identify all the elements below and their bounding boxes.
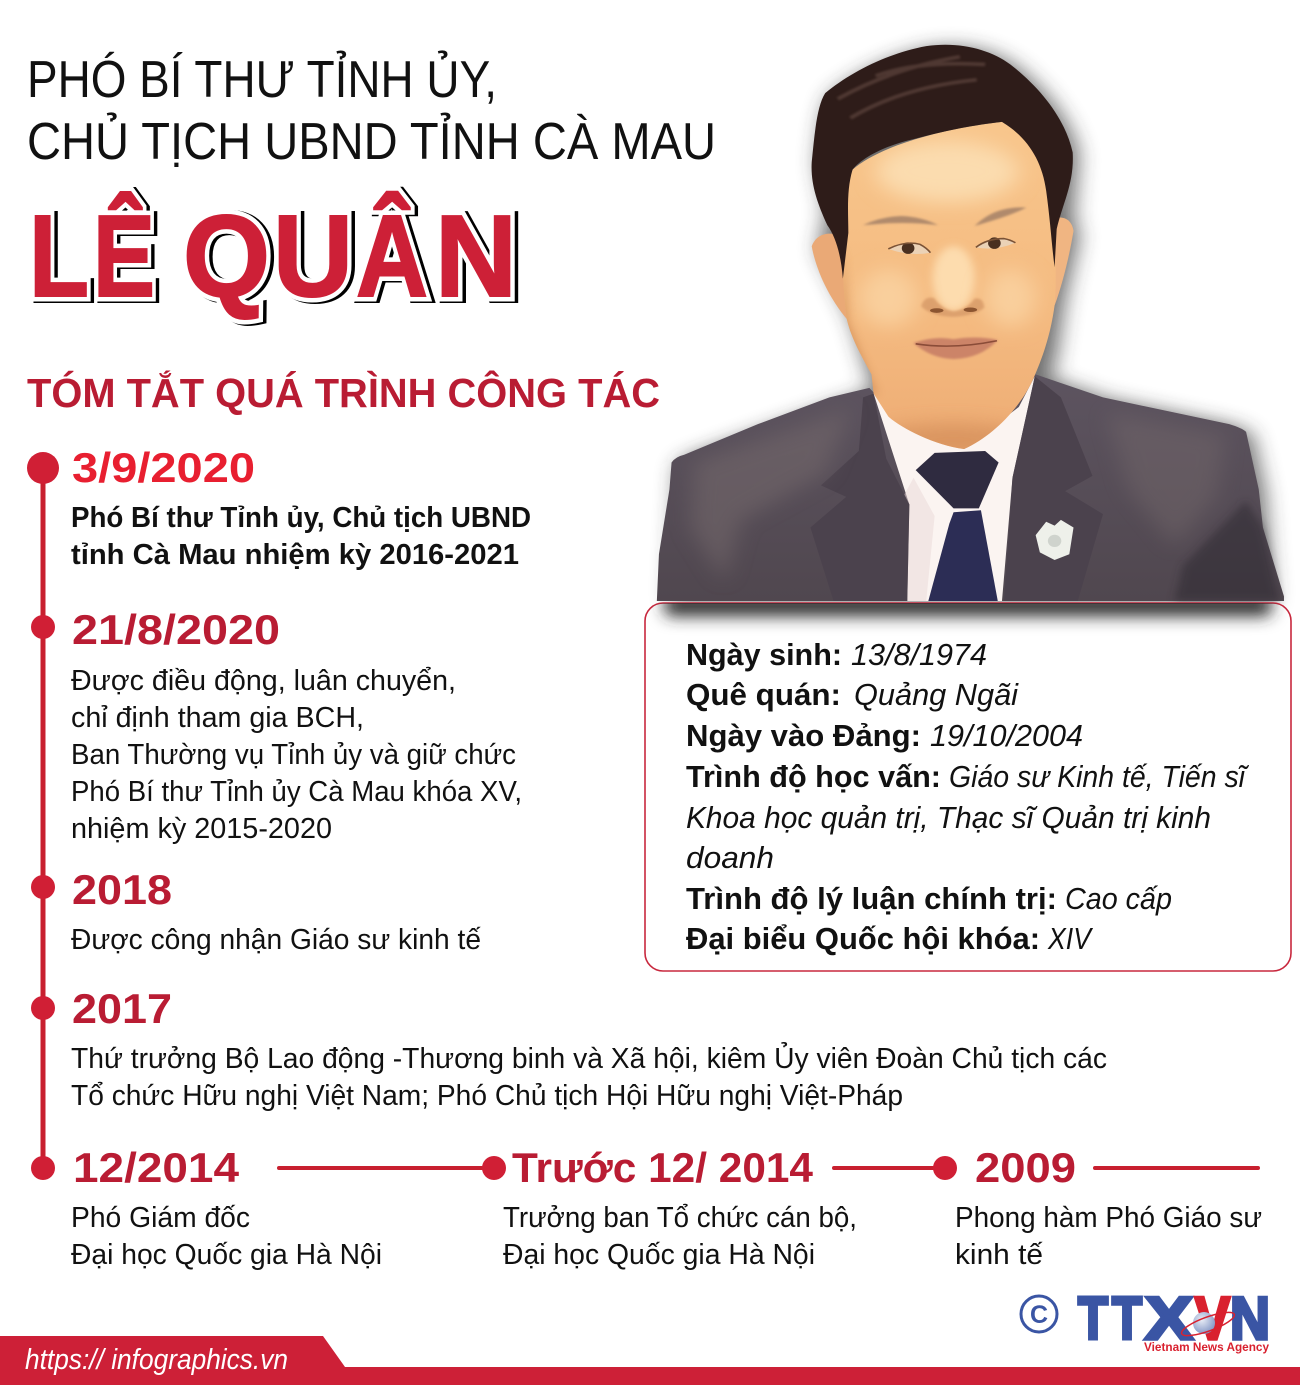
- entry: 21/8/2020: chỉ định tham gia BCH,: [71, 702, 364, 734]
- entry: 12/2014: 12/2014: [73, 1144, 240, 1191]
- entry: 21/8/2020: 21/8/2020: [72, 606, 280, 653]
- tie: [916, 451, 999, 508]
- icon: copyright: C: [1030, 1301, 1048, 1329]
- entry: 2009: Phong hàm Phó Giáo sư: [955, 1202, 1262, 1234]
- entry: 21/8/2020: Được điều động, luân chuyển,: [71, 665, 456, 697]
- entry: 2017: Thứ trưởng Bộ Lao động -Thương binh và Xã hội, kiêm Ủy viên Đoàn Chủ tịch các: [71, 1041, 1107, 1075]
- entry: 2009: [933, 1144, 1262, 1271]
- panel: personal profile: Ngày vào Đảng:: [686, 718, 921, 753]
- entry: 2017: Tổ chức Hữu nghị Việt Nam; Phó Chủ tịch Hội Hữu nghị Việt-Pháp: [71, 1080, 903, 1112]
- entry: 2018: Được công nhận Giáo sư kinh tế: [71, 924, 481, 956]
- title: position: PHÓ BÍ THƯ TỈNH ỦY,: [27, 50, 497, 109]
- panel: personal profile: Đại biểu Quốc hội khóa:: [686, 921, 1040, 956]
- silhouette shadow: [671, 47, 1273, 603]
- panel: personal profile: XIV: [1047, 921, 1094, 956]
- panel: personal profile: doanh: [686, 840, 774, 875]
- title: name: N: [435, 191, 517, 321]
- shirt: [874, 376, 1035, 601]
- suit shading: [1175, 501, 1280, 601]
- entry: 3/9/2020: [27, 444, 531, 571]
- panel: personal profile: Trình độ học vấn:: [686, 759, 941, 794]
- title: name: N: [435, 191, 517, 321]
- panel: personal profile: 19/10/2004: [930, 718, 1083, 753]
- title: name: Â: [359, 191, 431, 322]
- title: position: [27, 50, 716, 171]
- entry: 2009: kinh tế: [955, 1239, 1043, 1271]
- face lighting: [876, 141, 1019, 202]
- title: name: L: [32, 192, 92, 322]
- panel: personal profile: Cao cấp: [1065, 881, 1172, 916]
- suit jacket: [657, 374, 1284, 601]
- panel: personal profile: Quảng Ngãi: [854, 677, 1019, 712]
- icon: copyright: [1021, 1296, 1057, 1332]
- entry: before 12/2014: Đại học Quốc gia Hà Nội: [503, 1239, 815, 1271]
- logo: TTXVN: X: [1145, 1285, 1193, 1352]
- logo: TTXVN: V: [1195, 1285, 1230, 1352]
- nose: [921, 298, 984, 317]
- title: name: U: [273, 191, 353, 321]
- title: name: U: [276, 192, 356, 322]
- panel: personal profile: Ngày sinh:: [686, 637, 842, 672]
- title: name: Â: [356, 190, 428, 321]
- entry: 3/9/2020: 3/9/2020: [72, 444, 255, 491]
- portrait photo: [657, 45, 1284, 603]
- entry: 2017: 2017: [72, 985, 172, 1032]
- title: name: Q: [186, 192, 273, 322]
- entry: 2017: [31, 985, 1107, 1112]
- title: name: N: [438, 192, 520, 322]
- logo: TTXVN: Vietnam News Agency: [1144, 1340, 1269, 1354]
- entry: 21/8/2020: [31, 606, 522, 845]
- title: name: Q: [183, 191, 270, 321]
- entry: 2009: 2009: [975, 1144, 1076, 1191]
- logo: TTXVN: T: [1112, 1285, 1142, 1352]
- entry: 2018: 2018: [72, 866, 172, 913]
- heading: career summary: TÓM TẮT QUÁ TRÌNH CÔNG TÁC: [27, 370, 660, 416]
- entry: before 12/2014: Trước 12/ 2014: [512, 1144, 814, 1191]
- footer bar: https:// infographics.vn: [25, 1344, 288, 1376]
- entry: 3/9/2020: Phó Bí thư Tỉnh ủy, Chủ tịch UBND: [71, 502, 531, 534]
- panel: personal profile: Trình độ lý luận chính trị:: [686, 881, 1057, 916]
- ears: [812, 234, 848, 321]
- entry: 21/8/2020: Phó Bí thư Tỉnh ủy Cà Mau khóa XV,: [71, 776, 522, 808]
- face and neck: [843, 122, 1056, 449]
- entry: 12/2014: Đại học Quốc gia Hà Nội: [71, 1239, 382, 1271]
- hair: [812, 45, 1073, 279]
- mouth: [914, 337, 998, 359]
- panel: personal profile: 13/8/1974: [851, 637, 987, 672]
- logo: TTXVN: [1078, 1285, 1270, 1354]
- panel: personal profile: Khoa học quản trị, Thạc sĩ Quản trị kinh: [686, 800, 1211, 835]
- panel: personal profile: Quê quán:: [686, 677, 841, 712]
- entry: 21/8/2020: nhiệm kỳ 2015-2020: [71, 813, 332, 845]
- title: name: Q: [183, 191, 270, 321]
- footer bar: [0, 1336, 1300, 1385]
- panel: personal profile: Giáo sư Kinh tế, Tiến sĩ: [949, 759, 1250, 794]
- entry: 3/9/2020: tỉnh Cà Mau nhiệm kỳ 2016-2021: [71, 539, 519, 571]
- title: name: L: [29, 191, 89, 321]
- lapel pin: [1036, 520, 1074, 560]
- title: name: Â: [356, 190, 428, 321]
- title: name: L: [29, 191, 89, 321]
- logo: TTXVN: T: [1078, 1285, 1108, 1352]
- entry: 12/2014: Phó Giám đốc: [71, 1202, 250, 1234]
- title: name: [29, 190, 520, 322]
- title: name: Ê: [96, 192, 158, 322]
- eyes: [888, 243, 930, 254]
- timeline vertical line: [40, 468, 46, 1168]
- title: position: CHỦ TỊCH UBND TỈNH CÀ MAU: [27, 112, 716, 171]
- title: name: Ê: [93, 191, 155, 321]
- eyebrows: [863, 216, 938, 225]
- entry: 12/2014: [31, 1144, 494, 1271]
- entry: before 12/2014: Trưởng ban Tổ chức cán bộ,: [503, 1202, 857, 1234]
- entry: 21/8/2020: Ban Thường vụ Tỉnh ủy và giữ chức: [71, 739, 516, 771]
- title: name: Ê: [93, 191, 155, 321]
- panel: personal profile: [645, 594, 1291, 971]
- title: name: U: [273, 191, 353, 321]
- lapels: [810, 394, 909, 601]
- entry: before 12/2014: [482, 1144, 945, 1271]
- entry: 2018: [31, 866, 481, 956]
- logo: TTXVN: N: [1230, 1285, 1270, 1352]
